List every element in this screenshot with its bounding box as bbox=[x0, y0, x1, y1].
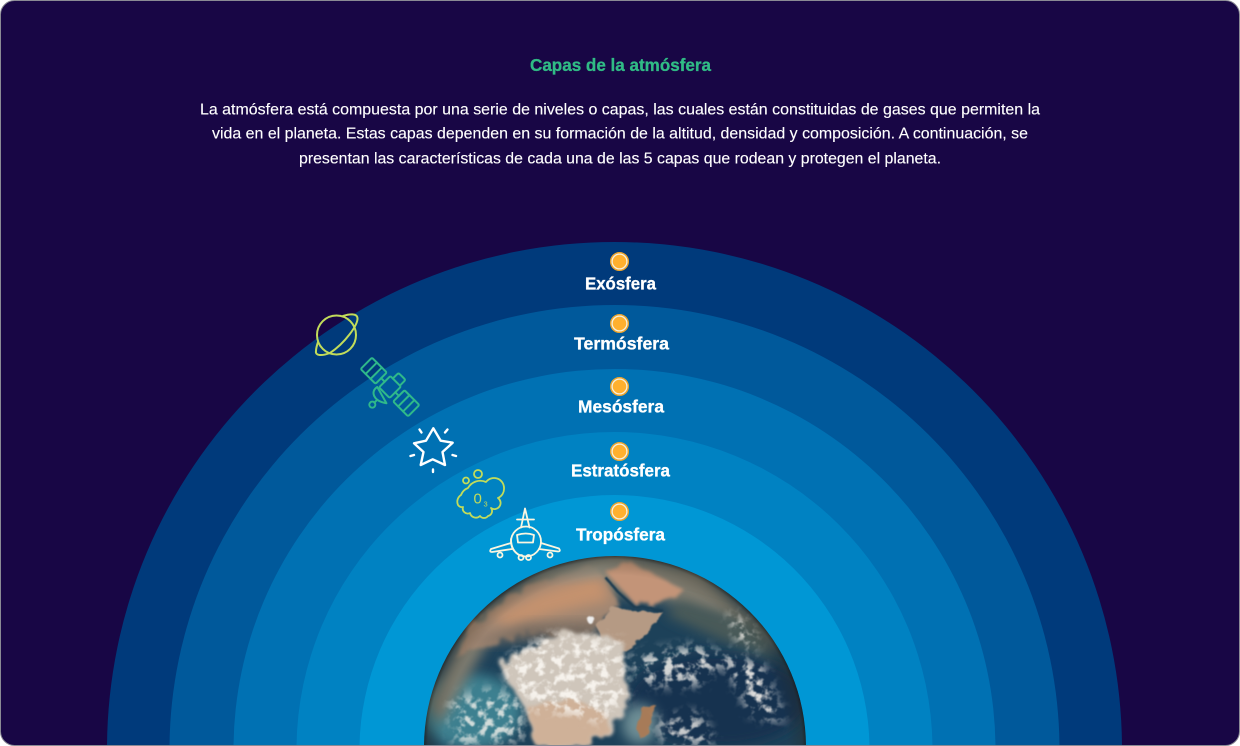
icon: planet bbox=[316, 314, 358, 355]
icon: star bbox=[410, 428, 456, 472]
limb shading bbox=[424, 556, 806, 746]
Arabian peninsula bbox=[606, 563, 685, 606]
icon: satellite bbox=[360, 357, 420, 417]
label: Termósfera bbox=[574, 315, 669, 354]
white patch over Ethiopia bbox=[587, 616, 595, 624]
icon: ozone cloud: 3 bbox=[484, 500, 488, 508]
title: Capas de la atmósfera bbox=[530, 55, 711, 75]
Madagascar bbox=[637, 704, 655, 739]
layer: Tropósfera bbox=[360, 495, 870, 746]
label: Exósfera: Exósfera bbox=[585, 274, 656, 294]
layer: Termósfera bbox=[170, 305, 1060, 746]
layer: Mesósfera bbox=[234, 369, 996, 746]
central and southern Africa bbox=[500, 630, 630, 746]
intro paragraph: La atmósfera está compuesta por una serie de niveles o capas, las cuales están constituidas de gases que permiten la bbox=[200, 102, 1040, 118]
cloud bands bbox=[450, 610, 785, 745]
Horn of Africa bbox=[596, 606, 663, 652]
icon: ozone cloud bbox=[457, 470, 504, 518]
label: Mesósfera bbox=[578, 378, 664, 416]
icon: ozone cloud: 0 bbox=[474, 490, 482, 508]
limb haze bbox=[428, 552, 806, 725]
atmosphere layers diagram bbox=[107, 242, 1122, 746]
layer: Estratósfera bbox=[296, 432, 932, 746]
label: Estratósfera: Estratósfera bbox=[571, 460, 670, 480]
Sahara and Sahel bbox=[452, 566, 618, 655]
intro paragraph: presentan las características de cada una de las 5 capas que rodean y protegen el planeta. bbox=[299, 150, 941, 168]
label: Termósfera: Termósfera bbox=[574, 334, 669, 354]
icon: airplane bbox=[490, 508, 560, 560]
label: Estratósfera bbox=[571, 443, 670, 480]
label: Tropósfera bbox=[576, 503, 665, 544]
layer: Exósfera bbox=[107, 242, 1122, 746]
earth globe bbox=[422, 552, 808, 746]
intro paragraph: vida en el planeta. Estas capas dependen en su formación de la altitud, densidad y composición. A continuación, se bbox=[212, 126, 1028, 142]
ocean tones bbox=[422, 674, 522, 746]
Red Sea and Gulf of Aden bbox=[606, 578, 663, 611]
intro paragraph bbox=[200, 102, 1040, 168]
label: Mesósfera: Mesósfera bbox=[578, 396, 664, 416]
label: Tropósfera: Tropósfera bbox=[576, 524, 665, 544]
label: Exósfera bbox=[585, 253, 656, 294]
